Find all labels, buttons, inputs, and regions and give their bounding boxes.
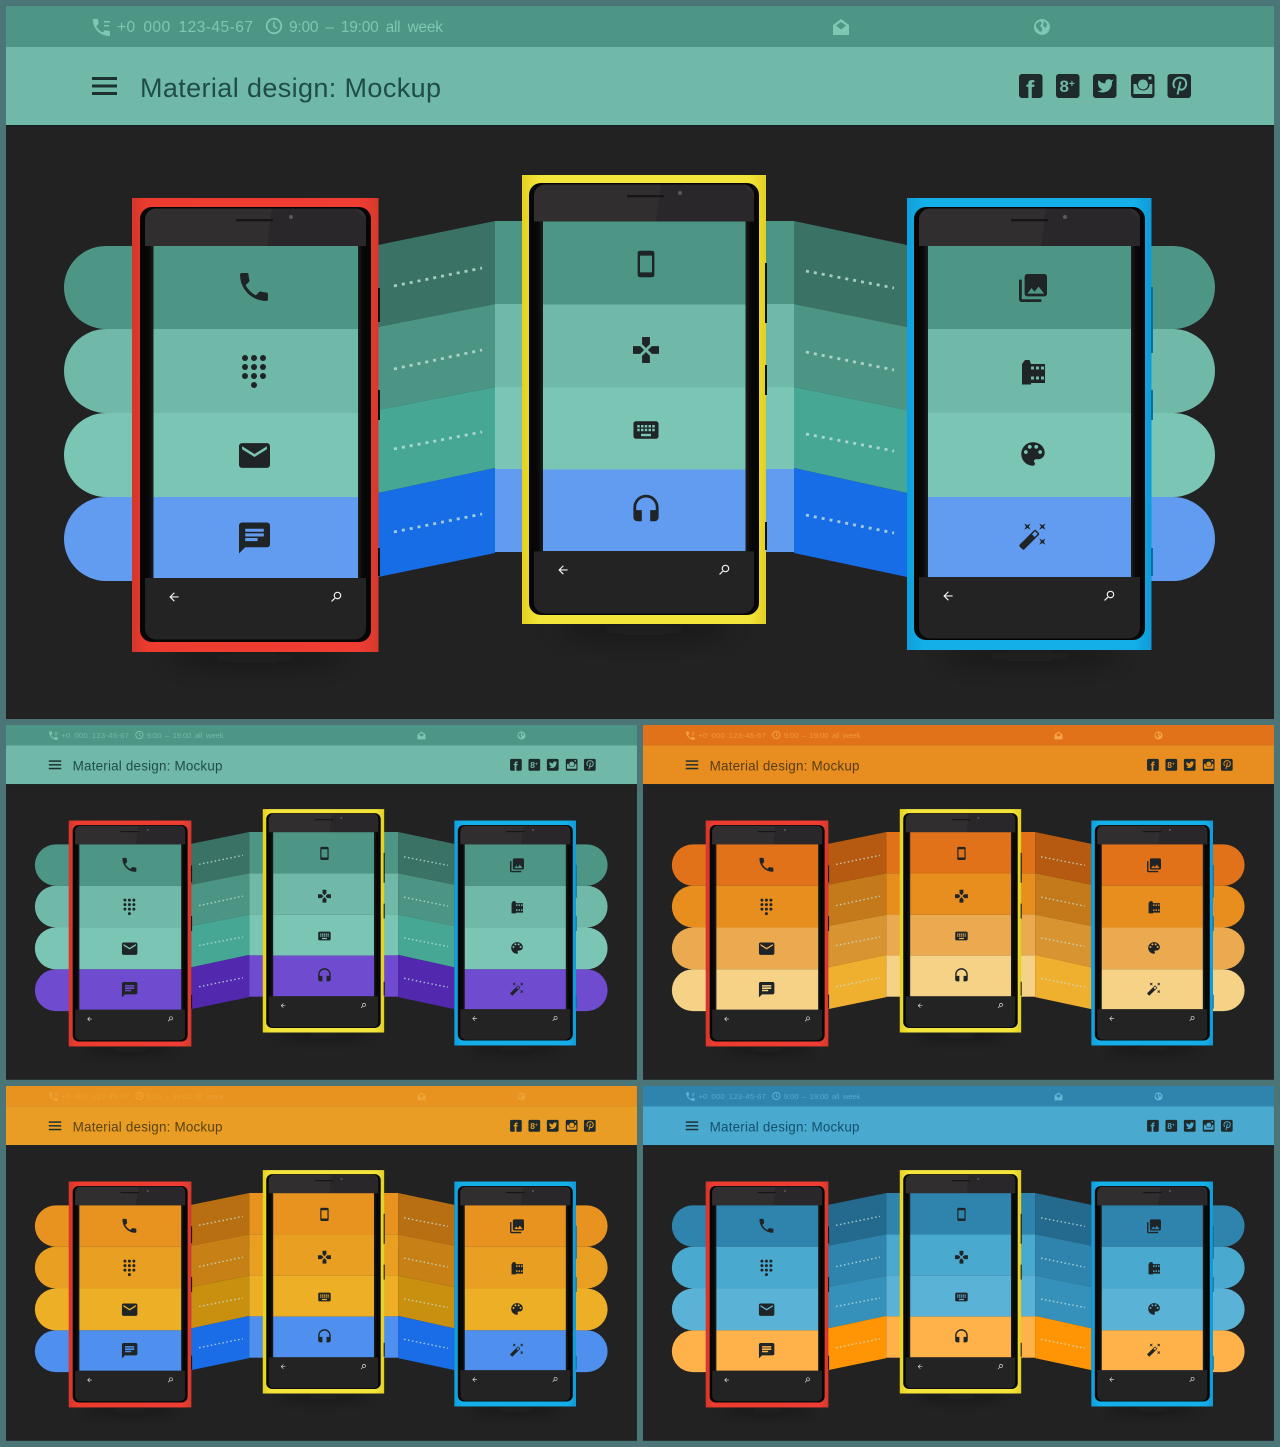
panel: orange variant: Material design: Mockup	[710, 758, 859, 773]
phones showcase	[6, 125, 1274, 719]
blue phone screen	[928, 246, 1131, 577]
icon: keyboard	[634, 421, 658, 439]
header bar with title: Material design: Mockup	[140, 73, 441, 103]
panel: main mockup	[6, 6, 1274, 719]
phone: yellow	[522, 175, 767, 624]
icon: dialpad	[242, 355, 266, 388]
panel: orange variant: +0 000 123-45-67	[698, 731, 766, 740]
phone: blue	[907, 198, 1153, 650]
icon: chat	[239, 522, 270, 554]
panel: blue and orange variant: +0 000 123-45-67	[698, 1092, 766, 1101]
top contact bar: 9:00 – 19:00 all week	[289, 19, 443, 36]
panel: amber and blue variant: 9:00 – 19:00 all week	[147, 1092, 224, 1101]
icon: gamepad	[633, 337, 659, 363]
top contact bar: +0 000 123-45-67	[117, 19, 253, 36]
left pills	[64, 246, 140, 581]
panel: orange variant: 9:00 – 19:00 all week	[784, 731, 861, 740]
panel: blue and orange variant: Material design: Mockup	[710, 1119, 859, 1134]
right pills	[1140, 246, 1215, 581]
icon: storage card	[1022, 360, 1045, 384]
panel: teal and purple variant	[6, 725, 637, 1080]
nav: back and search	[169, 592, 341, 602]
panel: teal and purple variant: 9:00 – 19:00 all week	[147, 731, 224, 740]
header bar with title	[6, 47, 1274, 125]
icon: headset	[633, 495, 659, 521]
icon: phone	[240, 273, 268, 301]
icon: photo library	[1019, 274, 1047, 302]
phone: red	[132, 198, 380, 652]
panel: amber and blue variant	[6, 1086, 637, 1441]
icon: magic wand	[1019, 524, 1046, 550]
panel: orange variant	[643, 725, 1274, 1080]
panel: amber and blue variant: +0 000 123-45-67	[61, 1092, 129, 1101]
top contact bar	[6, 6, 1274, 47]
panel: teal and purple variant: +0 000 123-45-67	[61, 731, 129, 740]
right fold ribbon	[763, 221, 907, 577]
nav: back and search	[558, 565, 729, 575]
panel: amber and blue variant: Material design: Mockup	[73, 1119, 222, 1134]
yellow phone screen	[543, 222, 746, 551]
panel: blue and orange variant	[643, 1086, 1274, 1441]
icon: smartphone	[638, 251, 654, 277]
icon: palette	[1021, 442, 1045, 466]
panel: blue and orange variant: 9:00 – 19:00 all week	[784, 1092, 861, 1101]
red phone screen	[154, 246, 358, 578]
panel: teal and purple variant: Material design: Mockup	[73, 758, 222, 773]
nav: back and search	[943, 591, 1114, 601]
phone shadows	[165, 622, 1120, 666]
left fold ribbon	[378, 221, 525, 577]
icon: email	[239, 443, 270, 468]
